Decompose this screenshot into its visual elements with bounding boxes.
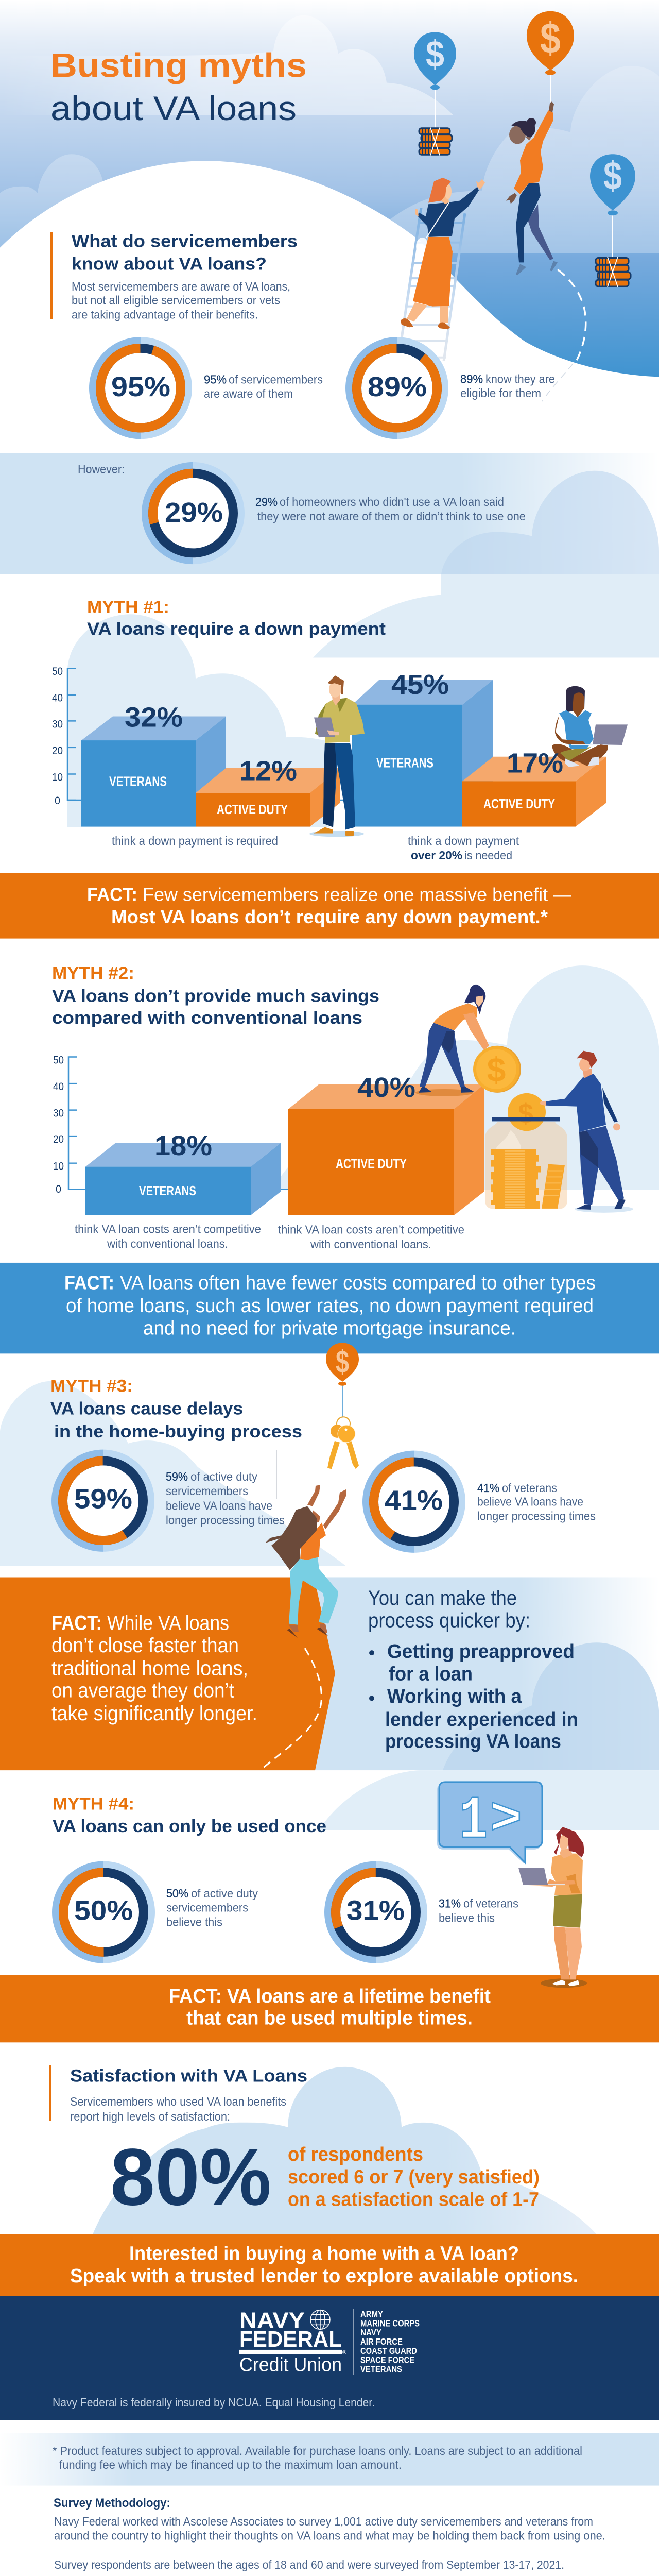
illustration: jar of coins: $ (518, 1098, 533, 1129)
captions: over 20% (411, 849, 462, 862)
fact band 2 (0, 1263, 659, 1353)
text block (72, 280, 290, 321)
icon: blue balloon with coins right (590, 154, 635, 287)
text block: don’t close faster than (51, 1634, 239, 1657)
text: insurance notice: Navy Federal is federally insured by NCUA. Equal Housing Lender. (53, 2396, 375, 2409)
cloud behind myth 4 (319, 1770, 659, 1830)
logo: Navy Federal Credit Union: FEDERAL (239, 2327, 342, 2352)
donut: 29% (142, 462, 245, 564)
donut: 50%: servicemembers (166, 1901, 248, 1914)
donut: 41% (358, 1447, 596, 1556)
donut: 41%: believe VA loans have (477, 1495, 583, 1509)
axis: 10 (52, 771, 63, 783)
text block: Servicemembers who used VA loan benefits (70, 2095, 286, 2108)
heading (87, 597, 386, 639)
stat: 80%: 80% (110, 2132, 271, 2222)
icon: orange balloon held by woman: $ (540, 14, 561, 62)
heading: MYTH #1: (87, 597, 169, 617)
donut: 59% (47, 1446, 285, 1555)
heading (50, 1376, 302, 1442)
illustration: woman with laptop standing (518, 1827, 587, 1988)
list: service branches (360, 2309, 420, 2375)
call to action band: Speak with a trusted lender to explore available options. (70, 2265, 578, 2287)
fact band 2: of home loans, such as lower rates, no down payment required (66, 1295, 594, 1317)
donut: 50%: of active duty (191, 1887, 258, 1900)
bar: active duty 12%: 12% (239, 756, 297, 786)
cloud behind myth 2 (273, 965, 659, 1190)
donut: 50% (52, 1861, 258, 1963)
illustration: man at jar (540, 1051, 633, 1213)
fact band 4: FACT: VA loans are a lifetime benefit (169, 1986, 491, 2007)
title: about VA loans (50, 90, 297, 127)
donut: 31% (324, 1860, 518, 1964)
text block: 29% caption: they were not aware of them or didn’t think to use one (257, 510, 526, 523)
illustration: woman lifting coin (415, 985, 489, 1096)
heading (72, 231, 298, 274)
panel: myth 2 (52, 963, 633, 1251)
illustration: woman on ladder (401, 178, 485, 329)
icon: globe (310, 2310, 330, 2329)
panel: myth 4 (52, 1782, 542, 1964)
axis: 20 (53, 1133, 64, 1145)
text block: While VA loans (107, 1612, 229, 1634)
donut: 89%: 89% (368, 371, 427, 402)
captions (75, 1223, 464, 1251)
cloud behind satisfaction (93, 2067, 597, 2234)
stat text: of respondents (288, 2144, 423, 2165)
bar: veterans 18%: 18% (154, 1130, 212, 1161)
heading: MYTH #4: (53, 1794, 134, 1814)
captions: is needed (464, 849, 512, 862)
donut: 89%: 89% (460, 372, 483, 385)
donut: 50%: 50% (74, 1895, 133, 1926)
panel: however band (0, 453, 659, 574)
dashed flight path faint continuation (542, 364, 573, 401)
bar: veterans 18%: VETERANS (139, 1184, 196, 1198)
text block: Most servicemembers are aware of VA loans, (72, 280, 290, 293)
donut: 95%: are aware of them (204, 387, 293, 400)
captions: with conventional loans. (107, 1237, 228, 1250)
donut: 59%: servicemembers (166, 1484, 248, 1498)
text block: 29% caption: 29% (255, 495, 278, 509)
label: 17%: 17% (507, 748, 563, 778)
bar: veterans 18% (85, 1130, 281, 1215)
fact band 2: and no need for private mortgage insurance. (143, 1318, 516, 1340)
panel: satisfaction (49, 2065, 540, 2222)
bullet list: Getting preapproved (387, 1641, 575, 1663)
donut: 31%: 31% (346, 1895, 405, 1926)
icon: blue balloon with coins left: $ (426, 32, 444, 75)
bar: veterans 45%: 45% (391, 669, 449, 700)
donut: 95%: 95% (204, 372, 227, 386)
heading: VA loans cause delays (50, 1398, 243, 1418)
heading: know about VA loans? (72, 253, 267, 274)
list: service branches: MARINE CORPS (360, 2318, 420, 2328)
donut: 89% (340, 332, 555, 444)
heading: Satisfaction with VA Loans (70, 2066, 307, 2086)
logo: Navy Federal Credit Union (239, 2308, 346, 2376)
axis: 50 (52, 666, 63, 677)
donut: 41%: 41% (385, 1485, 443, 1516)
bar: active duty 17% (462, 757, 606, 827)
bar: veterans 45% (352, 669, 493, 827)
heading: VA loans don’t provide much savings (52, 986, 379, 1006)
text block: but not all eligible servicemembers or vets (72, 294, 280, 307)
donut: 41%: of veterans (502, 1481, 557, 1495)
cloud behind myth 3 (0, 1381, 346, 1566)
heading (52, 963, 379, 1028)
axis: 40 (52, 692, 63, 704)
bar: veterans 32%: VETERANS (109, 774, 167, 789)
logo: Navy Federal Credit Union: ® (342, 2350, 346, 2356)
panel: fact 3 orange (0, 1577, 335, 1772)
captions: with conventional loans. (310, 1238, 431, 1251)
bar: active duty 40%: ACTIVE DUTY (336, 1157, 407, 1172)
heading: compared with conventional loans (52, 1008, 362, 1028)
heading (368, 1587, 530, 1632)
axis (53, 1055, 293, 1195)
stat text: scored 6 or 7 (very satisfied) (288, 2166, 540, 2188)
panel: survey methodology (54, 2496, 605, 2571)
illustration: woman with laptop (552, 686, 628, 767)
panel: footnote (0, 2433, 659, 2486)
cloud behind myth 1 (67, 574, 659, 827)
text block (51, 1612, 257, 1725)
fact band 1: Most VA loans don’t require any down payment.* (111, 907, 548, 927)
bullet list: processing VA loans (385, 1731, 561, 1752)
donut: 95%: 95% (111, 371, 170, 402)
stat text: on a satisfaction scale of 1-7 (288, 2189, 539, 2210)
fact band 2: FACT: (64, 1273, 114, 1294)
panel: survey methodology: around the country to highlight their thoughts on VA loans and what may be holding them back from using one. (54, 2529, 605, 2543)
heading: in the home-buying process (54, 1421, 302, 1442)
donut: 59%: 59% (166, 1470, 188, 1483)
bar chart (53, 1055, 484, 1215)
icon: blue balloon with coins left (414, 32, 456, 155)
panel: survey methodology: Navy Federal worked with Ascolese Associates to survey 1,001 active duty servicemembers and veterans from (54, 2515, 593, 2528)
donut: 59%: longer processing times (166, 1513, 285, 1527)
panel: footnote: funding fee which may be financed up to the maximum loan amount. (59, 2458, 402, 2471)
donut: 29%: 29% (165, 497, 223, 528)
donut: 31%: 31% (439, 1897, 461, 1910)
heading: MYTH #3: (50, 1376, 133, 1396)
stat text (288, 2144, 540, 2210)
text block: take significantly longer. (51, 1702, 257, 1725)
heading: VA loans can only be used once (53, 1816, 326, 1836)
fact band 4 (0, 1975, 659, 2042)
text block: FACT: (51, 1612, 102, 1634)
icon: blue balloon with coins right: $ (603, 154, 622, 198)
donut: 50%: believe this (166, 1915, 222, 1928)
call to action band: Interested in buying a home with a VA loan? (129, 2243, 519, 2264)
axis: 20 (52, 745, 63, 757)
bar: veterans 45%: VETERANS (376, 756, 433, 771)
axis: 30 (53, 1108, 64, 1119)
icon: orange balloon with keys (326, 1343, 359, 1469)
text: however: However: (78, 463, 125, 476)
captions (112, 834, 519, 862)
text block: are taking advantage of their benefits. (72, 308, 258, 321)
bar: active duty 12%: ACTIVE DUTY (217, 803, 288, 817)
donut: 89%: know they are (485, 372, 555, 385)
donut: 95% (89, 337, 323, 439)
list: service branches: AIR FORCE (360, 2336, 403, 2347)
icon: orange balloon held by woman (527, 11, 574, 102)
donut: 41%: longer processing times (477, 1510, 596, 1522)
icon: speech bubble 1>: 1 (459, 1786, 488, 1856)
illustration: woman reaching for keys (265, 1485, 346, 1638)
icon: speech bubble 1>: > (490, 1787, 522, 1844)
illustration: man with tablet (309, 675, 365, 837)
text block: 29% caption (255, 495, 526, 523)
text block (70, 2095, 286, 2123)
icon: orange balloon with keys: $ (336, 1344, 349, 1380)
dashed path (258, 1648, 321, 1772)
donut: 50%: 50% (166, 1887, 188, 1900)
heading: What do servicemembers (72, 231, 298, 251)
axis: 0 (55, 795, 60, 807)
bar: active duty 17%: ACTIVE DUTY (483, 797, 555, 811)
label: 40%: 40% (357, 1072, 415, 1103)
text block: on average they don’t (51, 1680, 234, 1702)
bullet list: Working with a (387, 1686, 522, 1707)
axis: 10 (53, 1161, 64, 1173)
illustration: ladder (397, 208, 465, 369)
panel: myth 3 (47, 1343, 596, 1556)
heading: process quicker by: (368, 1609, 530, 1632)
captions: think VA loan costs aren’t competitive (278, 1223, 464, 1236)
heading: MYTH #2: (52, 963, 134, 983)
fact band 1: Few servicemembers realize one massive benefit — (143, 884, 571, 905)
donut: 59%: believe VA loans have (166, 1499, 272, 1513)
donut: 41%: 41% (477, 1481, 499, 1495)
bar: veterans 32% (81, 702, 226, 827)
list: service branches: NAVY (360, 2327, 381, 2337)
axis: 40 (53, 1081, 64, 1093)
icon: gold coin large: $ (487, 1051, 506, 1089)
captions: think VA loan costs aren’t competitive (75, 1223, 261, 1235)
captions: think a down payment is required (112, 834, 278, 848)
panel: survey methodology: Survey respondents are between the ages of 18 and 60 and were surveyed from September 13-17, 2021. (54, 2558, 564, 2571)
heading: You can make the (368, 1587, 517, 1609)
list: service branches: ARMY (360, 2309, 383, 2319)
text block: report high levels of satisfaction: (70, 2110, 230, 2123)
bar: veterans 32%: 32% (125, 702, 183, 733)
bar chart (52, 666, 606, 827)
bar: active duty 40% (288, 1084, 484, 1215)
list: service branches: COAST GUARD (360, 2346, 417, 2356)
illustration: floating woman (506, 101, 558, 275)
bullet list: for a loan (389, 1664, 473, 1685)
axis: 30 (52, 718, 63, 730)
axis: 0 (56, 1183, 61, 1195)
panel: quicker process (314, 1577, 659, 1770)
donut: 31%: of veterans (463, 1897, 518, 1910)
heading (53, 1794, 326, 1836)
fact band 4: that can be used multiple times. (186, 2008, 473, 2029)
title: Busting myths (50, 47, 307, 84)
text block: traditional home loans, (51, 1657, 248, 1680)
donut: 95%: of servicemembers (229, 372, 323, 386)
donut: 59%: of active duty (190, 1470, 258, 1483)
donut: 89%: eligible for them (460, 386, 541, 400)
bullet list (369, 1641, 578, 1752)
bar: active duty 12% (196, 756, 340, 827)
panel: what do servicemembers know (50, 231, 298, 321)
text block: 29% caption: of homeowners who didn't use a VA loan said (280, 495, 504, 509)
fact band 2: VA loans often have fewer costs compared to other types (120, 1273, 596, 1294)
panel: footer navy (0, 2296, 659, 2420)
fact band 1: FACT: (87, 884, 137, 905)
logo: Navy Federal Credit Union: Credit Union (239, 2354, 342, 2376)
icon: speech bubble 1> (437, 1782, 542, 1863)
panel: footnote: * Product features subject to approval. Available for purchase loans only. Loans are subject to an additional (53, 2444, 582, 2458)
illustration: jar of coins (485, 1093, 567, 1209)
axis (52, 666, 350, 807)
logo: Navy Federal Credit Union: NAVY (239, 2308, 305, 2333)
icon: gold coin large (473, 1046, 521, 1093)
panel: myth 1 (52, 597, 628, 862)
list: service branches: SPACE FORCE (360, 2355, 414, 2365)
panel: survey methodology: Survey Methodology: (54, 2496, 170, 2510)
bullet list: lender experienced in (385, 1709, 578, 1731)
title (50, 47, 307, 127)
list: service branches: VETERANS (360, 2364, 402, 2375)
dashed flight path (558, 269, 586, 361)
background: sky with clouds and white hill (0, 0, 659, 449)
donut: 31%: believe this (439, 1911, 495, 1924)
heading: VA loans require a down payment (87, 619, 386, 639)
captions: think a down payment (408, 834, 519, 848)
call to action band (0, 2234, 659, 2296)
donut: 59%: 59% (74, 1484, 132, 1515)
axis: 50 (53, 1055, 64, 1066)
fact band 1 (0, 873, 659, 939)
